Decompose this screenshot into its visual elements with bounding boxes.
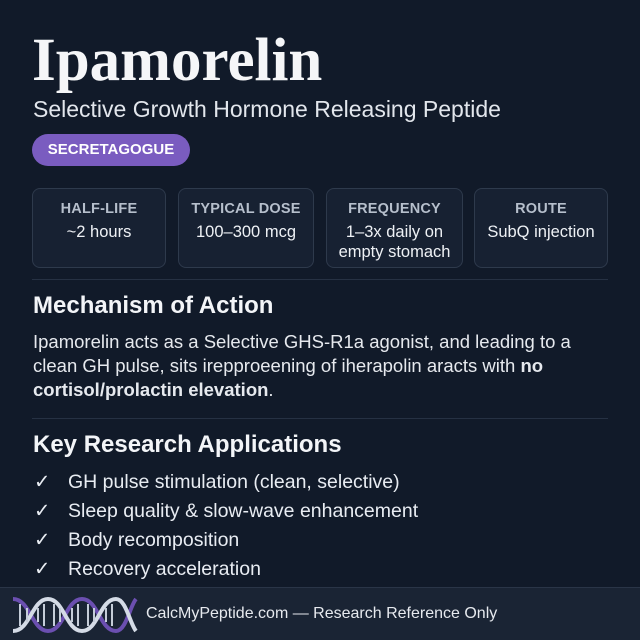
list: Recovery acceleration <box>68 558 261 580</box>
list <box>34 471 418 580</box>
list: ✓ <box>34 529 50 551</box>
card: route <box>474 188 608 268</box>
badge <box>32 134 190 166</box>
card: typical dose: 100–300 mcg <box>196 223 296 241</box>
card: typical dose: TYPICAL DOSE <box>191 201 301 217</box>
footer <box>0 587 640 640</box>
badge: SECRETAGOGUE <box>48 141 174 158</box>
icon: dna <box>13 597 138 633</box>
card: route: SubQ injection <box>487 223 595 241</box>
card: route: ROUTE <box>515 201 567 217</box>
card: frequency: FREQUENCY <box>348 201 441 217</box>
card: half-life: ~2 hours <box>67 223 131 241</box>
card: frequency <box>326 188 463 268</box>
footer text: CalcMyPeptide.com — Research Reference Only <box>146 605 497 622</box>
mechanism text: Ipamorelin acts as a Selective GHS-R1a agonist, and leading to a clean GH pulse, sits ireppro­eening of iherapolin aracts with no cortisol/prolactin elevation. <box>33 331 571 400</box>
list: Body recomposition <box>68 529 239 551</box>
list: Sleep quality & slow-wave enhancement <box>68 500 418 522</box>
list: ✓ <box>34 471 50 493</box>
list: ✓ <box>34 558 50 580</box>
heading: mechanism: Mechanism of Action <box>33 292 273 319</box>
card: half-life: HALF-LIFE <box>61 201 137 217</box>
list: GH pulse stimulation (clean, selective) <box>68 471 400 493</box>
subtitle: Selective Growth Hormone Releasing Peptide <box>33 96 501 122</box>
list: ✓ <box>34 500 50 522</box>
card: frequency: empty stomach <box>339 243 450 261</box>
title: Ipamorelin <box>32 27 322 94</box>
heading: applications: Key Research Applications <box>33 431 342 458</box>
card: typical dose <box>178 188 314 268</box>
card: half-life <box>32 188 166 268</box>
card: frequency: 1–3x daily on <box>346 223 443 241</box>
